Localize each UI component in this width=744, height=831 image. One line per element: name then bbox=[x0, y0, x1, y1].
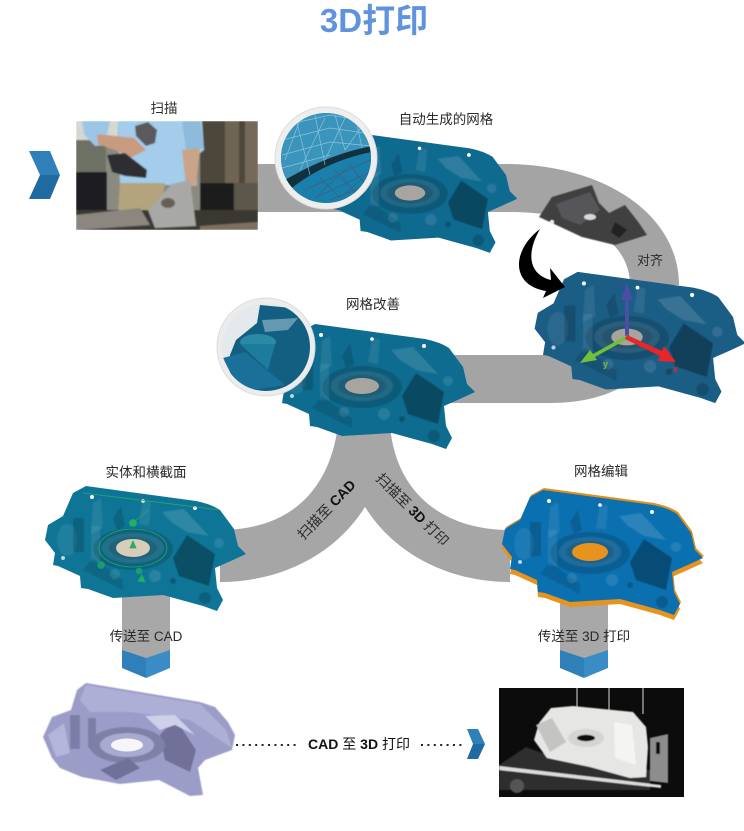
inset: surface close-up bbox=[217, 298, 315, 396]
coordinate axis y: y bbox=[603, 359, 608, 369]
coordinate axis y bbox=[580, 335, 629, 369]
CAD part centre hole bbox=[111, 738, 143, 752]
part: automatic mesh bbox=[326, 134, 517, 253]
flow band: split to CAD and 3D print bbox=[220, 425, 510, 582]
flow band: alignment back to mesh improvement bbox=[440, 355, 640, 403]
heading: automatic mesh: 自动生成的网格 bbox=[399, 112, 494, 127]
mesh part centre hole bbox=[395, 185, 425, 201]
flow band: send to 3D print bbox=[560, 585, 608, 660]
inset: mesh close-up bbox=[275, 107, 377, 209]
coordinate axis x: x bbox=[673, 364, 678, 374]
coordinate axis z bbox=[617, 281, 633, 337]
label: send to CAD: 传送至 CAD bbox=[110, 629, 183, 644]
arrow: down to 3D print bbox=[560, 650, 608, 678]
coordinate axis z: z bbox=[617, 281, 622, 291]
solid part centre hole bbox=[116, 539, 150, 557]
part: mesh edit with offset bbox=[502, 488, 704, 620]
heading: mesh edit: 网格编辑 bbox=[574, 464, 628, 479]
dotted line: label to printer bbox=[421, 744, 464, 746]
part: scanned dark model bbox=[539, 185, 647, 245]
arrow: align curved black arrow bbox=[519, 229, 565, 298]
improved part centre hole bbox=[345, 378, 379, 394]
part: mesh improvement bbox=[274, 324, 475, 449]
label: send to 3D print: 传送至 3D 打印 bbox=[538, 628, 630, 644]
start chevron bbox=[29, 151, 60, 199]
cross-section green lines and markers bbox=[83, 493, 220, 582]
edited part centre hole bbox=[572, 543, 608, 561]
coordinate axis x bbox=[625, 335, 678, 374]
title: 3D打印 bbox=[320, 2, 428, 39]
label: CAD to 3D print: CAD 至 3D 打印 bbox=[308, 736, 410, 752]
flow band: scan to alignment bbox=[256, 164, 679, 285]
photo: printed part in 3D printer bbox=[499, 688, 684, 797]
small chevron bbox=[467, 729, 485, 759]
part: solid with cross-section bbox=[45, 486, 246, 611]
aligned part centre hole bbox=[611, 329, 643, 345]
arrow: down to CAD bbox=[122, 650, 170, 678]
photo: hand-held scanning bbox=[76, 121, 258, 230]
band label: scan to 3D print: 扫描至 3D 打印 bbox=[373, 470, 452, 549]
band label: scan to CAD: 扫描至 CAD bbox=[294, 477, 359, 543]
heading: mesh improvement: 网格改善 bbox=[346, 297, 400, 312]
flow band: send to CAD bbox=[122, 585, 170, 660]
label: alignment: 对齐 bbox=[637, 253, 663, 268]
heading: scan: 扫描 bbox=[150, 101, 178, 116]
part: aligned model with axes bbox=[535, 272, 744, 403]
dotted line: CAD to label bbox=[236, 744, 297, 746]
part: CAD model bbox=[43, 683, 235, 796]
heading: solid and cross section: 实体和横截面 bbox=[106, 465, 186, 480]
